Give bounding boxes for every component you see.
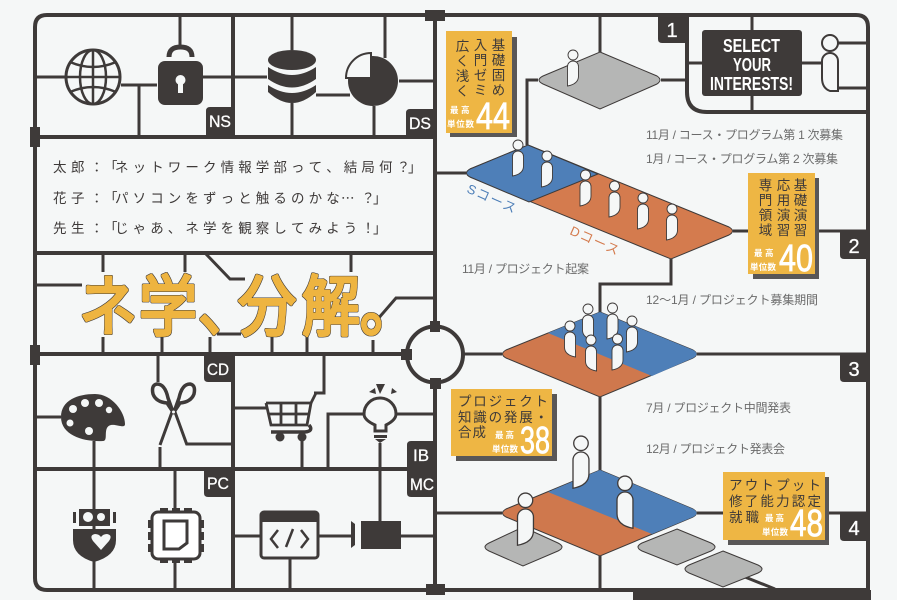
schedule: project proposal: 11月 / プロジェクト起案 bbox=[462, 262, 589, 276]
figure: student start bbox=[568, 50, 578, 86]
card: fundamentals 40: 応用演習 bbox=[774, 178, 790, 238]
schedule: project recruitment: 12〜1月 / プロジェクト募集期間 bbox=[646, 292, 818, 307]
figure: D course students bbox=[580, 170, 678, 240]
card: project 38: 最高 bbox=[495, 430, 516, 440]
icon: palette bbox=[61, 394, 125, 441]
card: project 38: プロジェクト bbox=[458, 394, 548, 409]
figure: S course students bbox=[512, 140, 552, 187]
icon: pie chart bbox=[346, 53, 398, 106]
card: output 48: 48 bbox=[790, 503, 823, 545]
card: fundamentals 40 bbox=[748, 173, 819, 280]
card: basics 44 bbox=[446, 31, 517, 138]
schedule: course recruitment 1: 11月 / コース・プログラム第 1 次募集 bbox=[646, 127, 843, 142]
tab: CD bbox=[204, 354, 233, 382]
card: output 48 bbox=[723, 472, 829, 545]
icon: scissors bbox=[152, 384, 194, 445]
platform: S and D course bbox=[466, 145, 732, 259]
card: basics 44: 単位数 bbox=[447, 119, 474, 129]
figure: select person bbox=[822, 35, 838, 91]
label: D course: Dコース bbox=[568, 223, 621, 258]
tab: step 4: 4 bbox=[848, 518, 860, 540]
tab: step 2 bbox=[840, 231, 868, 259]
figure: project students bbox=[564, 303, 638, 371]
callout: select your interests: YOUR bbox=[733, 55, 771, 75]
icon: robot heart bbox=[73, 509, 116, 562]
panel: dialogue: 先生：「じゃあ、ネ学を観察してみよう！」 bbox=[53, 217, 386, 237]
tab: step 2: 2 bbox=[848, 236, 860, 258]
callout: select your interests: SELECT bbox=[723, 36, 780, 56]
figure: output students bbox=[518, 436, 633, 545]
platform: gray start bbox=[539, 52, 660, 109]
icon: nozzle block bbox=[351, 521, 401, 549]
card: basics 44: 44 bbox=[476, 96, 510, 138]
icon: light bulb bbox=[364, 384, 397, 443]
panel: dialogue: 花子：「パソコンをずっと触るのかな…？」 bbox=[53, 187, 386, 207]
callout: select your interests: INTERESTS! bbox=[710, 74, 793, 94]
card: fundamentals 40: 40 bbox=[779, 238, 813, 280]
label: S course: Sコース bbox=[465, 181, 518, 216]
panel: dialogue: 太郎：「ネットワーク情報学部って、結局何？」 bbox=[53, 156, 422, 176]
card: fundamentals 40: 最高 bbox=[754, 248, 776, 258]
tab: IB MC: MC bbox=[410, 475, 434, 494]
card: project 38: 合成 bbox=[458, 425, 486, 440]
icon: shopping cart bbox=[266, 393, 325, 442]
card: basics 44: 入門ゼミ bbox=[472, 38, 487, 98]
card: project 38: 知識の発展・ bbox=[458, 409, 548, 425]
tab: NS: NS bbox=[209, 112, 231, 131]
tab: CD: CD bbox=[207, 360, 229, 379]
card: output 48: 修了能力認定 bbox=[729, 494, 821, 509]
icon: padlock bbox=[158, 47, 203, 105]
icon: chip bbox=[148, 508, 204, 563]
schedule: final: 12月 / プロジェクト発表会 bbox=[646, 442, 785, 456]
card: fundamentals 40: 基礎演習 bbox=[792, 177, 807, 238]
title: ネ学、分解。 bbox=[79, 272, 418, 345]
card: basics 44: 最高 bbox=[450, 105, 472, 115]
card: project 38 bbox=[451, 389, 557, 462]
callout: select your interests bbox=[702, 30, 802, 96]
tab: step 4 bbox=[840, 513, 868, 541]
card: output 48: 単位数 bbox=[762, 527, 788, 537]
tab: DS bbox=[406, 109, 435, 137]
platform: project bbox=[502, 312, 696, 397]
icon: code window bbox=[261, 511, 318, 558]
schedule: midterm: 7月 / プロジェクト中間発表 bbox=[646, 400, 791, 415]
tab: step 1: 1 bbox=[666, 20, 678, 42]
tab: IB MC bbox=[407, 441, 435, 497]
ring gate bbox=[401, 321, 463, 389]
card: fundamentals 40: 単位数 bbox=[750, 262, 776, 272]
tab: step 3 bbox=[840, 354, 868, 382]
icon: globe bbox=[66, 50, 120, 104]
tab: PC: PC bbox=[207, 474, 229, 493]
platform: output bbox=[502, 470, 696, 556]
card: project 38: 単位数 bbox=[492, 444, 518, 454]
schedule: course recruitment 2: 1月 / コース・プログラム第 2 次募集 bbox=[646, 151, 838, 166]
card: fundamentals 40: 専門領域 bbox=[756, 178, 772, 238]
card: output 48: 最高 bbox=[765, 513, 786, 523]
card: basics 44: 広く浅く bbox=[454, 39, 469, 99]
panel: dialogue bbox=[53, 156, 422, 237]
icon: database bbox=[268, 50, 316, 103]
tab: NS bbox=[206, 107, 233, 137]
tab: DS: DS bbox=[409, 114, 431, 133]
tab: step 1 bbox=[658, 15, 686, 43]
card: basics 44: 基礎固め bbox=[490, 37, 505, 98]
card: project 38: 38 bbox=[520, 420, 550, 462]
platform: gray outputs bbox=[485, 527, 762, 587]
card: output 48: アウトプット bbox=[729, 478, 821, 493]
card: output 48: 就職 bbox=[729, 510, 760, 525]
tab: PC bbox=[204, 469, 233, 497]
tab: IB MC: IB bbox=[413, 446, 429, 465]
tab: step 3: 3 bbox=[848, 359, 860, 381]
